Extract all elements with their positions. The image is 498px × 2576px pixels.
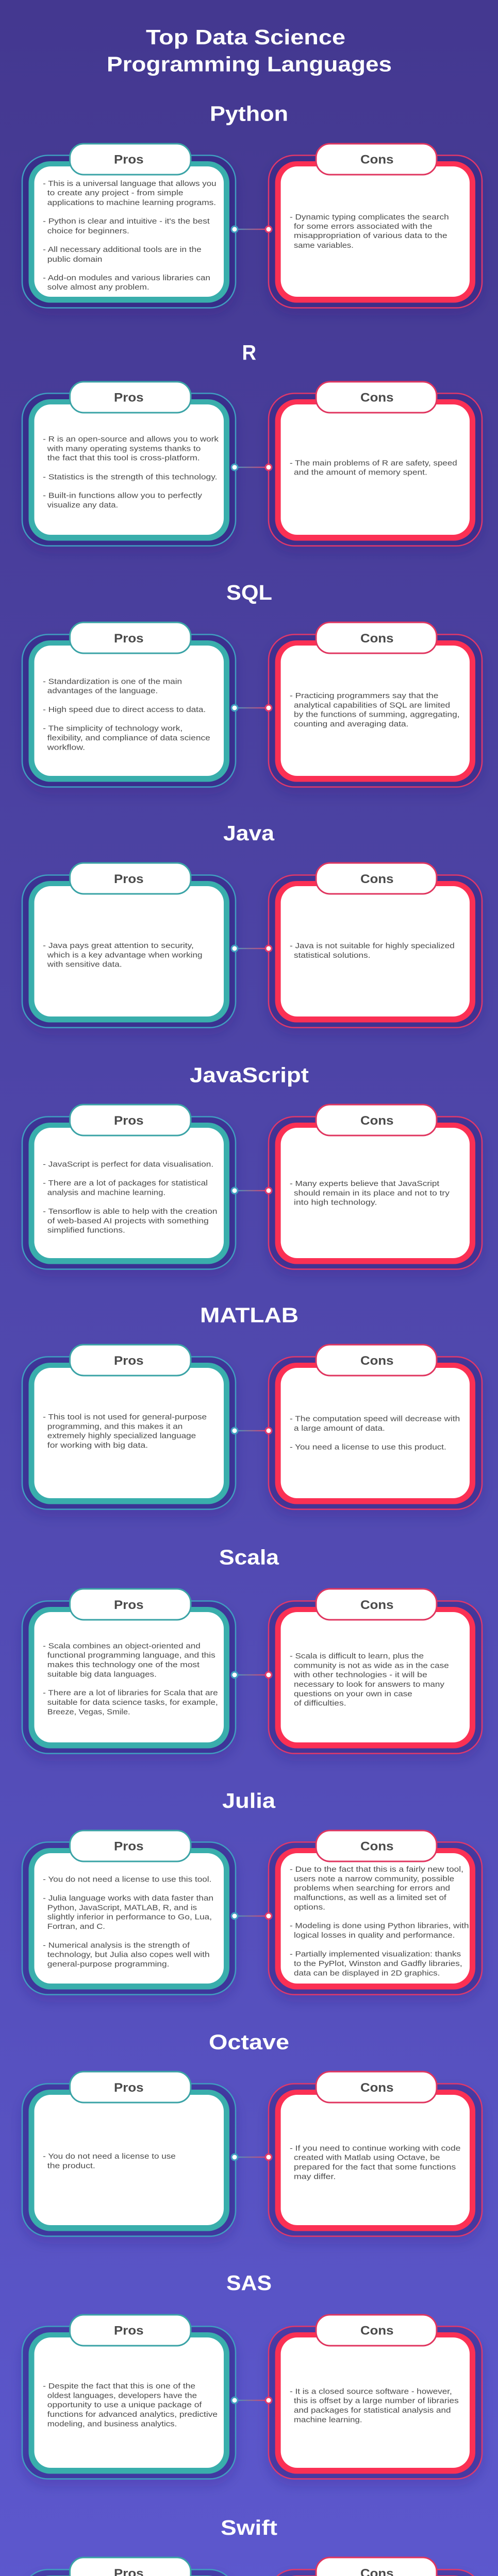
text: Scala pros list: makes this technology one of the most [47,1660,200,1669]
text: Scala pros list: suitable big data languages. [47,1670,157,1679]
cons card frame [269,394,482,546]
connector: MATLAB [231,1428,272,1434]
text: Scala cons list [290,1652,449,1707]
connector: Python [231,226,272,232]
heading: JavaScript: JavaScript [190,1063,309,1087]
text: SAS pros list: modeling, and business analytics. [47,2419,177,2428]
text: Julia pros list: - You do not need a license to use this tool. [43,1875,211,1884]
text: JavaScript pros list: of web-based AI projects with something [47,1216,209,1225]
text: SAS cons list: this is offset by a large number of libraries [294,2397,459,2405]
panel: MATLAB pros [22,1345,236,1510]
text: Python pros list: - Python is clear and intuitive - it's the best [43,217,210,226]
cons card frame [269,2327,482,2479]
text: Java pros list: - Java pays great attention to security, [43,941,194,950]
connector: Java [231,945,272,952]
panel: SQL cons [269,622,482,787]
text: Julia cons list: to the PyPlot, Winston and Gadfly libraries, [294,1959,462,1968]
text: JavaScript cons list: should remain in its place and not to try [294,1189,450,1197]
label: Cons [316,2072,437,2103]
heading: MATLAB: MATLAB [200,1303,298,1327]
heading: Julia: Julia [222,1789,276,1812]
label: Pros: Pros [114,152,143,167]
text: SAS pros list: - Despite the fact that this is one of the [43,2382,195,2391]
text: Python cons list: same variables. [294,241,354,250]
connector: Julia [231,1913,272,1919]
text: Julia pros list: Python, JavaScript, MATLAB, R, and is [47,1903,197,1912]
text: Julia pros list: technology, but Julia also copes well with [47,1951,210,1959]
text: Scala cons list: - Scala is difficult to learn, plus the [290,1652,424,1660]
text: JavaScript pros list: simplified functions. [47,1226,125,1235]
heading: SQL: SQL [226,581,272,604]
text: MATLAB cons list: - You need a license to use this product. [290,1443,446,1452]
panel: Java cons [269,863,482,1027]
connector: R [231,464,272,470]
text: JavaScript pros list: - Tensorflow is able to help with the creation [43,1207,217,1216]
text: MATLAB pros list: - This tool is not used for general-purpose [43,1413,207,1421]
text: Scala pros list: - There are a lot of libraries for Scala that are [43,1689,218,1698]
label: Cons: Cons [360,632,394,646]
pros card frame [22,156,236,308]
text: R pros list: - Statistics is the strength of this technology. [43,472,217,481]
text: Java pros list [43,941,202,969]
text: R cons list: - The main problems of R are safety, speed [290,459,457,467]
text: JavaScript pros list: - There are a lot of packages for statistical [43,1179,208,1188]
text: SQL cons list [290,691,460,728]
text: Scala pros list: functional programming language, and this [47,1651,215,1660]
text: JavaScript cons list [290,1179,450,1207]
text: Scala cons list: community is not as wide as in the case [294,1661,449,1670]
text: SQL pros list: - Standardization is one of the main [43,677,182,686]
connector: SAS [231,2397,272,2403]
text: R pros list: - Built-in functions allow you to perfectly [43,492,202,500]
panel: SAS cons [269,2315,482,2479]
text: Octave cons list: may differ. [294,2172,336,2181]
pros card frame [22,2327,236,2479]
text: Julia cons list: options. [294,1903,325,1911]
text: Julia cons list: - Partially implemented visualization: thanks [290,1950,461,1959]
text: SQL cons list: - Practicing programmers say that the [290,691,438,700]
cons card frame [269,875,482,1027]
text: Scala cons list: questions on your own in case [294,1689,412,1698]
cons card frame [269,2083,482,2236]
text: MATLAB cons list [290,1415,460,1452]
text: MATLAB pros list: for working with big data. [47,1441,148,1450]
text: Octave pros list: the product. [47,2161,95,2170]
text: SQL cons list: counting and averaging data. [294,720,408,728]
label: Cons [316,1831,437,1861]
text: SQL pros list: advantages of the language. [47,687,158,696]
panel: MATLAB cons [269,1345,482,1510]
text: Python pros list: - This is a universal language that allows you [43,179,217,188]
label: Cons [316,382,437,413]
text: Julia cons list: - Modeling is done using Python libraries, with [290,1922,469,1930]
pros card frame [22,1601,236,1754]
text: Octave cons list [290,2144,461,2181]
label: Cons [316,2557,437,2576]
text: Python cons list: misappropriation of various data to the [294,231,447,240]
heading: SAS: SAS [226,2271,272,2295]
label: Pros [70,1105,191,1136]
text: JavaScript pros list [43,1160,217,1235]
pros card frame [22,394,236,546]
text: Java cons list: statistical solutions. [294,951,370,960]
text: R pros list: visualize any data. [47,501,118,510]
text: Julia cons list: - Due to the fact that this is a fairly new tool, [290,1865,463,1874]
text: MATLAB pros list: programming, and this makes it an [47,1422,182,1431]
text: Python pros list: choice for beginners. [47,227,129,235]
text: JavaScript pros list: - JavaScript is perfect for data visualisation. [43,1160,213,1168]
text: SQL pros list [43,677,210,752]
text: JavaScript cons list: into high technology. [294,1198,377,1207]
text: SAS cons list: and packages for statistical analysis and [294,2406,451,2415]
pros card frame [22,1842,236,1995]
label: Cons: Cons [360,2324,394,2338]
text: Java cons list: - Java is not suitable for highly specialized [290,941,455,950]
text: Scala pros list [43,1641,218,1716]
panel: Scala cons [269,1589,482,1754]
text: Scala pros list: suitable for data science tasks, for example, [47,1698,218,1707]
label: Pros: Pros [114,1114,143,1128]
text: Octave pros list [43,2152,176,2170]
heading: Scala: Scala [219,1546,279,1569]
pros card frame [22,635,236,787]
text: Python pros list: solve almost any problem. [47,283,150,292]
panel: Java pros [22,863,236,1027]
pros card frame [22,2083,236,2236]
title [107,25,392,76]
text: Julia pros list [43,1875,213,1969]
pros card frame [22,875,236,1027]
text: SQL pros list: - The simplicity of technology work, [43,724,182,733]
connector: Octave [231,2154,272,2160]
text: SQL cons list: by the functions of summing, aggregating, [294,710,460,719]
text: R pros list: - R is an open-source and allows you to work [43,435,219,444]
label: Pros [70,622,191,653]
title: Programming Languages [107,53,392,76]
label: Cons [316,2315,437,2346]
panel: Python cons [269,144,482,308]
label: Pros [70,1345,191,1376]
text: MATLAB cons list: a large amount of data. [294,1424,385,1433]
panel: R cons [269,382,482,546]
label: Cons: Cons [360,872,394,886]
text: Python pros list: applications to machine learning programs. [47,198,216,207]
label: Pros [70,2557,191,2576]
text: Python pros list: - Add-on modules and various libraries can [43,274,210,282]
cons card frame [269,1601,482,1754]
text: SAS pros list [43,2382,218,2428]
text: JavaScript cons list: - Many experts believe that JavaScript [290,1179,440,1188]
text: Python pros list: - All necessary additional tools are in the [43,245,202,254]
heading: Python: Python [210,102,288,126]
text: Julia cons list: logical losses in quality and performance. [294,1931,455,1940]
text: SAS pros list: oldest languages, developers have the [47,2391,197,2400]
text: R cons list [290,459,457,477]
text: SAS pros list: opportunity to use a unique package of [47,2401,202,2410]
text: Python pros list: public domain [47,255,102,264]
text: Scala cons list: with other technologies - it will be [293,1671,427,1680]
text: Julia cons list: problems when searching for errors and [294,1884,450,1893]
text: MATLAB pros list [43,1413,207,1450]
label: Pros: Pros [114,1598,143,1612]
pros card frame [22,1117,236,1269]
label: Cons [316,622,437,653]
text: Julia cons list [290,1865,469,1977]
label: Cons: Cons [360,2081,394,2095]
label: Pros [70,382,191,413]
text: SAS cons list: machine learning. [294,2415,362,2424]
text: Python pros list: to create any project - from simple [47,189,184,197]
panel: SQL pros [22,622,236,787]
label: Cons: Cons [360,1114,394,1128]
cons card frame [269,2570,482,2576]
panel: R pros [22,382,236,546]
label: Pros [70,144,191,175]
panel: Swift cons [269,2557,482,2576]
text: R pros list: with many operating systems thanks to [47,444,201,453]
heading: R: R [242,341,256,364]
text: SAS pros list: functions for advanced analytics, predictive [47,2410,218,2419]
cons card frame [269,156,482,308]
text: Scala cons list: necessary to look for answers to many [294,1680,445,1689]
text: SQL pros list: workflow. [47,743,85,752]
connector: SQL [231,705,272,711]
text: SAS cons list: - It is a closed source software - however, [290,2387,452,2396]
text: Python pros list [43,179,217,292]
text: R pros list [43,435,219,510]
connector: Scala [231,1672,272,1678]
text: Julia cons list: malfunctions, as well as a limited set of [294,1893,447,1902]
text: Python cons list [290,213,449,250]
label: Cons: Cons [360,1354,394,1368]
label: Cons: Cons [360,391,394,405]
label: Pros: Pros [114,1839,143,1854]
text: SAS cons list [290,2387,459,2424]
pros card frame [22,1357,236,1510]
panel: Scala pros [22,1589,236,1754]
panel: Julia pros [22,1831,236,1995]
text: SQL pros list: flexibility, and compliance of data science [47,734,210,742]
text: Julia pros list: - Julia language works with data faster than [43,1894,213,1903]
panel: Swift pros [22,2557,236,2576]
panel: Octave pros [22,2072,236,2236]
text: Julia cons list: users note a narrow community, possible [294,1874,454,1883]
text: R cons list: and the amount of memory spent. [294,468,427,477]
label: Pros [70,863,191,894]
text: Scala cons list: of difficulties. [294,1699,346,1707]
text: Julia cons list: data can be displayed in 2D graphics. [294,1969,440,1977]
text: Python cons list: for some errors associated with the [294,222,433,231]
text: Octave cons list: prepared for the fact that some functions [294,2163,456,2172]
heading: Swift: Swift [221,2516,277,2539]
text: Octave cons list: - If you need to continue working with code [290,2144,461,2153]
text: Java pros list: which is a key advantage when working [47,951,203,959]
cons card frame [269,1357,482,1510]
text: SQL pros list: - High speed due to direct access to data. [43,705,206,714]
label: Cons [316,1589,437,1620]
label: Cons [316,1105,437,1136]
label: Cons: Cons [360,1839,394,1854]
pros card frame [22,2570,236,2576]
heading: Java: Java [223,821,275,845]
label: Pros [70,2315,191,2346]
text: Scala pros list: Breeze, Vegas, Smile. [47,1707,130,1716]
label: Pros: Pros [114,2081,143,2095]
label: Pros [70,1589,191,1620]
panel: Python pros [22,144,236,308]
panel: JavaScript cons [269,1105,482,1269]
text: Scala pros list: - Scala combines an object-oriented and [43,1641,201,1650]
label: Pros: Pros [114,872,143,886]
text: JavaScript pros list: analysis and machine learning. [47,1188,165,1197]
label: Pros: Pros [114,632,143,646]
heading: Octave: Octave [209,2030,289,2054]
connector: JavaScript [231,1188,272,1194]
text: Julia pros list: - Numerical analysis is the strength of [43,1941,190,1950]
text: Python cons list: - Dynamic typing complicates the search [290,213,449,222]
panel: JavaScript pros [22,1105,236,1269]
panel: Julia cons [269,1831,482,1995]
label: Pros: Pros [114,391,143,405]
label: Cons: Cons [360,1598,394,1612]
text: MATLAB pros list: extremely highly specialized language [47,1432,196,1440]
cons card frame [269,1117,482,1269]
text: Java cons list [290,941,455,960]
panel: SAS pros [22,2315,236,2479]
text: Octave cons list: created with Matlab using Octave, be [294,2154,440,2162]
text: Java pros list: with sensitive data. [47,960,122,969]
label: Pros [70,2072,191,2103]
label: Cons [316,1345,437,1376]
text: SQL cons list: analytical capabilities of SQL are limited [294,701,450,709]
label: Pros [70,1831,191,1861]
text: MATLAB cons list: - The computation speed will decrease with [290,1415,460,1423]
text: R pros list: the fact that this tool is cross-platform. [47,454,200,463]
label: Pros: Pros [114,2324,143,2338]
title: Top Data Science [146,25,345,49]
label: Pros: Pros [114,1354,143,1368]
text: Julia pros list: slightly inferior in performance to Go, Lua, [47,1913,212,1922]
cons card frame [269,1842,482,1995]
panel: Octave cons [269,2072,482,2236]
label: Cons [316,863,437,894]
cons card frame [269,635,482,787]
text: Octave pros list: - You do not need a license to use [43,2152,176,2161]
label: Cons [316,144,437,175]
text: Julia pros list: Fortran, and C. [47,1922,105,1931]
label: Cons: Cons [360,152,394,167]
text: Julia pros list: general-purpose programming. [47,1960,169,1969]
